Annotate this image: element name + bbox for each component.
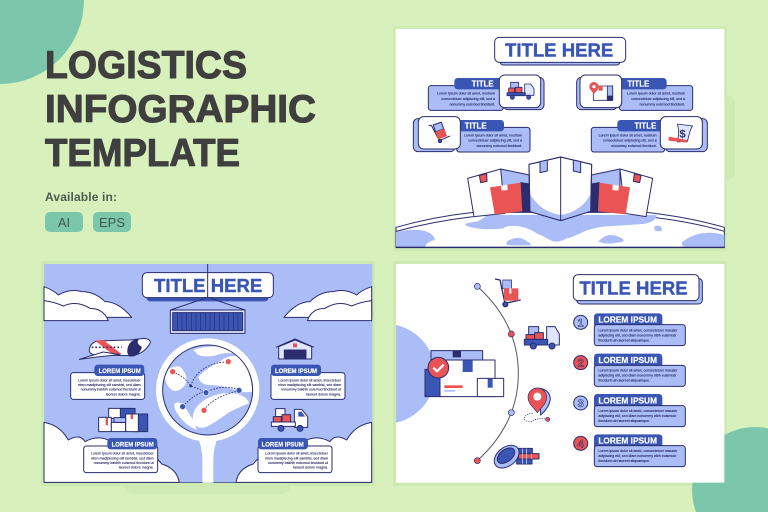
card: lower left text: LOREM IPSUM	[112, 441, 154, 448]
title banner	[142, 273, 273, 301]
icon: dollar receipt: $	[679, 128, 686, 140]
step 2: tincidunt utn laoreet aliquamque.	[598, 379, 650, 383]
step 1	[574, 313, 685, 346]
card: upper right text: Lorem ipsum dolor sit amet, insectetuer	[278, 378, 342, 382]
card: middle left trolley: nonummy euismod tincidunt.	[476, 144, 522, 148]
card: lower right text: nonummy bakhih euismod tincidunt ut	[268, 461, 328, 465]
card: top right location box: consectetuer adipiscing elit, sed a	[631, 97, 685, 101]
title banner: TITLE HERE	[154, 275, 262, 296]
card: upper right text	[271, 365, 345, 399]
icon: location pin with path	[524, 388, 550, 422]
card: lower left text: nonummy bakhih euismod tincidunt ut	[94, 461, 154, 465]
illustration: centre box	[529, 157, 592, 221]
card: lower left text	[84, 438, 158, 473]
card: upper left text: nonummy bakhih euismod tincidunt ut	[81, 388, 141, 392]
card: upper right text: LOREM IPSUM	[275, 368, 317, 375]
panel: bottom right infographic	[396, 264, 724, 483]
step 1: Lorem ipsum dolor sit amet, consectetuer massier	[598, 328, 678, 332]
card: top left truck: Lorem ipsum dolor sit amet, nostrum	[437, 92, 495, 96]
card: upper right text: laoreet dolore magna.	[306, 392, 341, 396]
badge: EPS	[93, 212, 131, 232]
badge: AI: AI	[58, 215, 70, 230]
step 1: 1	[578, 317, 584, 329]
card: top left truck	[428, 75, 544, 110]
step 1: LOREM IPSUM	[598, 314, 657, 324]
illustration: right boxes	[591, 169, 653, 217]
card: middle right money: TITLE	[634, 121, 657, 131]
icon: truck	[524, 327, 559, 349]
card: middle right money: Lorem ipsum dolor sit amet, nostrum	[599, 133, 657, 137]
title banner	[495, 37, 626, 65]
icon: airplane	[79, 338, 150, 359]
icon: pickup truck	[271, 409, 308, 431]
step 1: tincidunt utn laoreet aliquamque.	[598, 338, 650, 342]
card: top right location box: nonummy euismod tincidunt.	[639, 102, 685, 106]
timeline arc with nodes	[474, 283, 518, 464]
icon: location pin box	[589, 82, 613, 100]
step 3: 3	[578, 398, 584, 410]
card: top left truck: consectetuer adipiscing elit, sed a	[441, 97, 495, 101]
card: top right location box	[577, 75, 693, 110]
step 2: LOREM IPSUM	[598, 355, 657, 365]
card: upper left text: nirsn madipiscing elit sambisl, sed diam	[78, 383, 141, 387]
card: lower right text: nirsn madipiscing elit sambisl, sed diam	[265, 456, 328, 460]
illustration: left boxes	[468, 169, 529, 217]
heading: main title	[45, 44, 316, 175]
shipping container	[170, 297, 245, 333]
card: middle left trolley: TITLE	[465, 121, 487, 131]
step 3: Lorem ipsum dolor sit amet, consectetuer massier	[598, 409, 678, 413]
card: upper left text	[71, 365, 145, 399]
card: upper left text: LOREM IPSUM	[99, 368, 141, 375]
step 3: tincidunt utn laoreet aliquamque.	[598, 419, 650, 423]
icon: hand trolley	[429, 122, 450, 143]
text: available in: Available in:	[45, 190, 117, 204]
heading: main title: INFOGRAPHIC	[45, 88, 316, 131]
card: middle right money	[591, 117, 707, 152]
magnifier globe with routes	[156, 338, 259, 483]
title banner	[573, 275, 702, 304]
badge: AI	[45, 212, 83, 232]
card: middle left trolley: Lorem ipsum dolor sit amet, nostrum	[464, 133, 522, 137]
card: middle left trolley	[413, 117, 530, 152]
step 3: adipiscing elit, sed diam nonummy nibh euismodr	[598, 414, 677, 418]
card: upper right text: nirsn madipiscing elit sambisl, sed diam	[278, 383, 341, 387]
card: middle right money: consectetuer adipiscing elit, sed a	[603, 139, 657, 143]
card: upper right text: nonummy bakhih euismod tincidunt ut	[281, 388, 341, 392]
heading: main title: TEMPLATE	[45, 132, 240, 175]
card: top right location box: TITLE	[627, 79, 650, 89]
hanging line	[206, 264, 209, 297]
title banner: TITLE HERE	[505, 40, 613, 61]
card: lower right text	[258, 438, 332, 473]
step 2	[574, 354, 685, 386]
step 2: adipiscing elit, sed diam nonummy nibh euismodr	[598, 374, 677, 378]
icon: delivery truck	[507, 82, 534, 99]
clouds: upper right	[284, 287, 372, 321]
panel: top right infographic	[396, 29, 724, 248]
card: middle right money: nonummy euismod tincidunt.	[611, 144, 657, 148]
step 2: 2	[578, 358, 584, 370]
half circle at left edge	[396, 325, 435, 423]
icon: warehouse	[276, 339, 314, 359]
icon: stacked boxes	[99, 408, 148, 432]
card: lower left text: nirsn madipiscing elit sambisl, sed diam	[91, 456, 154, 460]
step 4	[574, 434, 685, 467]
step 1: adipiscing elit, sed diam nonummy nibh euismodr	[598, 333, 677, 337]
panel: bottom left infographic	[44, 264, 372, 483]
badge: EPS: EPS	[99, 215, 125, 230]
illustration: globe ground	[396, 212, 724, 248]
card: top left truck: nonummy euismod tincidunt.	[449, 102, 495, 106]
step 4: LOREM IPSUM	[598, 435, 657, 445]
step 2: Lorem ipsum dolor sit amet, consectetuer massier	[598, 369, 678, 373]
card: lower left text: Lorem ipsum dolor sit amet, insectetuer	[91, 452, 154, 456]
card: top right location box: Lorem ipsum dolor sit amet, nostrum	[627, 92, 685, 96]
title banner: TITLE HERE	[579, 277, 688, 298]
step 4: tincidunt utn laoreet aliquamque.	[598, 459, 650, 463]
card: middle left trolley: consectetuer adipiscing elit, sed a	[468, 139, 522, 143]
card: lower right text: laoreet dolore magna.	[293, 466, 328, 470]
step 3: LOREM IPSUM	[598, 395, 657, 405]
card: lower right text: LOREM IPSUM	[262, 441, 304, 448]
step 3	[574, 394, 685, 427]
clouds: lower left	[44, 422, 179, 482]
card: lower left text: laoreet dolore magna.	[119, 466, 154, 470]
step 4: 4	[578, 438, 585, 450]
card: top left truck: TITLE	[472, 79, 494, 89]
clouds: upper left	[44, 287, 132, 321]
step 4: Lorem ipsum dolor sit amet, consectetuer massier	[598, 449, 678, 453]
decorative circle: bottom right	[692, 427, 768, 512]
icon: coins	[490, 441, 539, 473]
card: upper left text: Lorem ipsum dolor sit amet, insectetuer	[78, 378, 141, 382]
decorative circle: top left	[0, 0, 84, 84]
card: lower right text: Lorem ipsum dolor sit amet, insectetuer	[265, 452, 329, 456]
card: upper left text: laoreet dolore magna.	[106, 392, 141, 396]
heading: main title: LOGISTICS	[45, 44, 247, 87]
illustration: stacked boxes with check	[425, 351, 504, 397]
clouds: lower right	[236, 422, 372, 482]
icon: hand trolley	[495, 279, 521, 307]
step 4: adipiscing elit, sed diam nonummy nibh euismodr	[598, 454, 677, 458]
